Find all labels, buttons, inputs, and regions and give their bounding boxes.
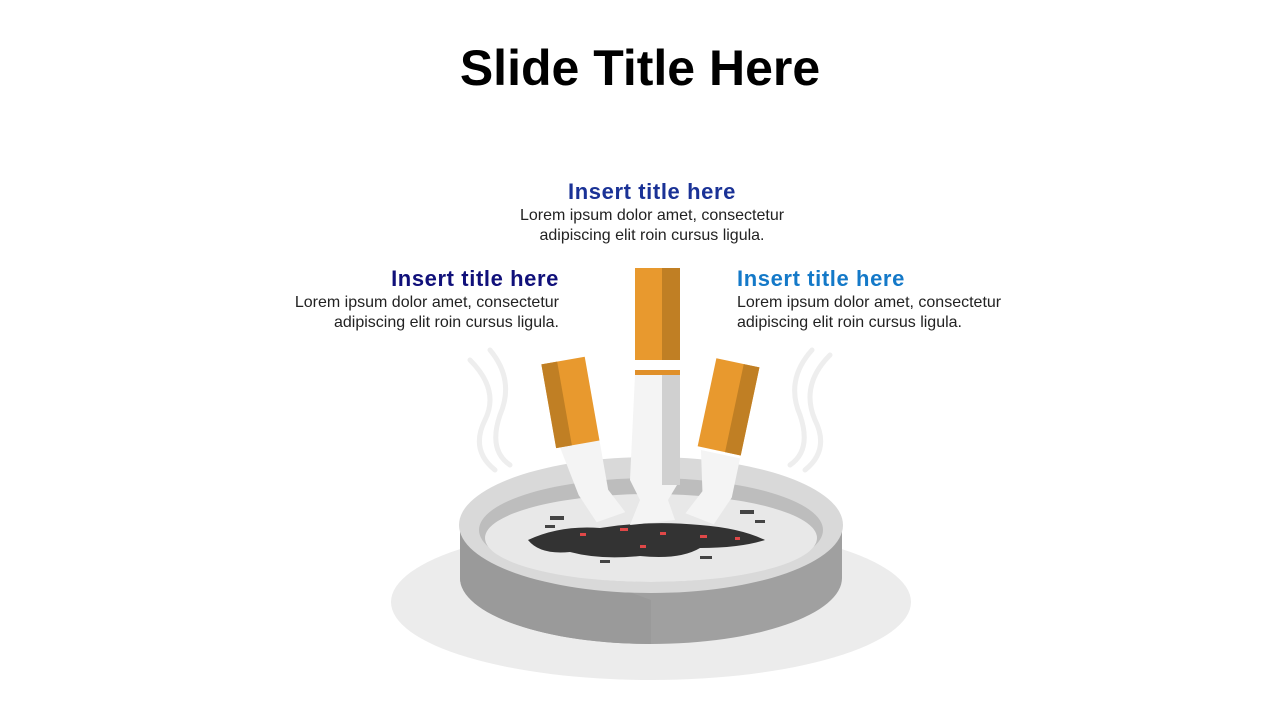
text block: left: Lorem ipsum dolor amet, consectetur [295,294,559,311]
shadow [391,524,911,680]
text block: right [737,266,1001,330]
ash [528,523,765,557]
cigarette: right [682,358,759,527]
text block: left [295,266,559,330]
ashtray body [460,525,842,644]
text block: top: Lorem ipsum dolor amet, consectetur [520,207,784,224]
text block: top: adipiscing elit roin cursus ligula. [540,226,764,244]
text block: left: adipiscing elit roin cursus ligula. [334,314,559,330]
text block: right: Insert title here [737,266,905,291]
text block: top [520,179,784,244]
text block: top: Insert title here [568,179,736,204]
text block: right: Lorem ipsum dolor amet, consectetur [737,294,1001,311]
smoke [470,350,830,470]
cigarette: left [541,355,626,527]
title: Slide Title Here [460,40,820,96]
cigarette: middle [630,268,680,525]
text block: left: Insert title here [391,266,559,291]
text block: right: adipiscing elit roin cursus ligula. [737,314,962,330]
